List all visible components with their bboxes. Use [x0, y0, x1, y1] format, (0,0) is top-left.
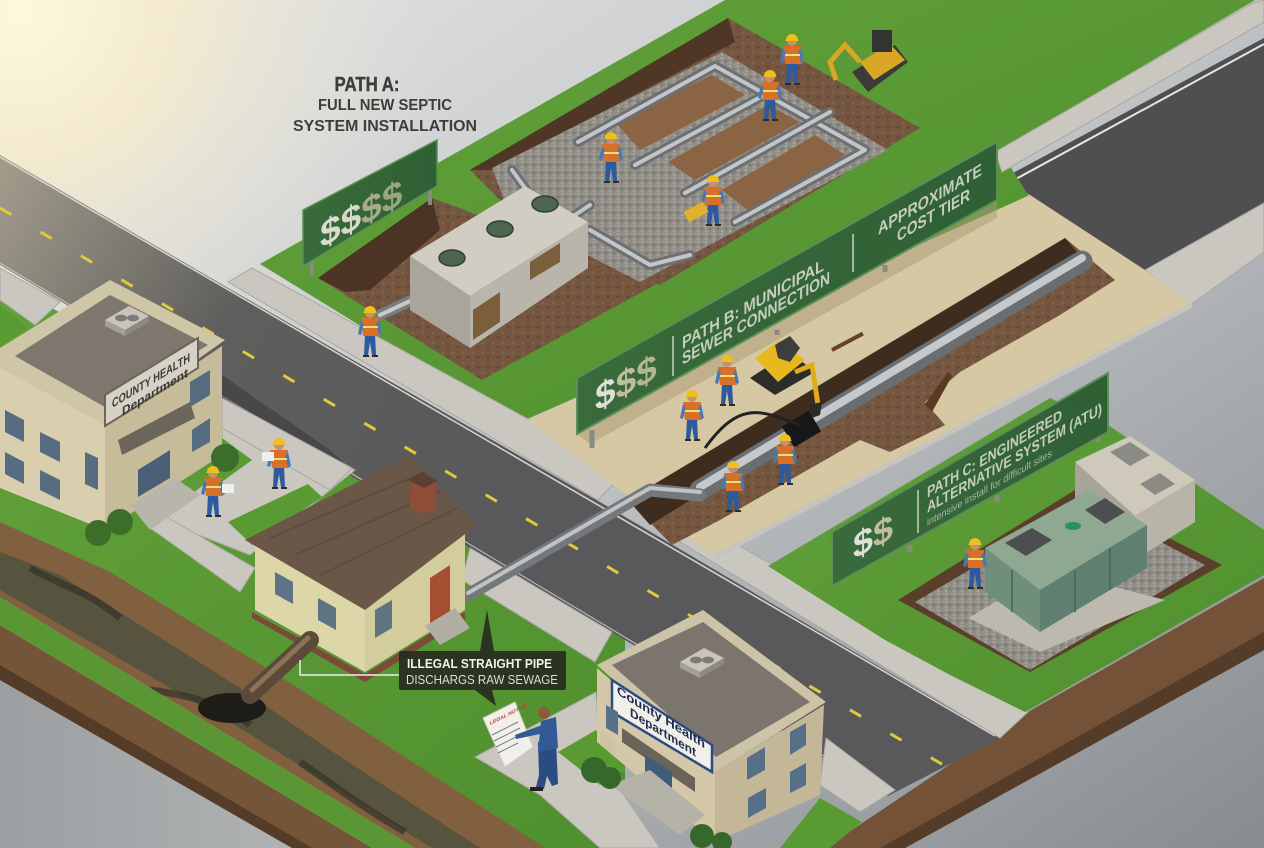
sign C: engineered alternative: [832, 373, 1108, 586]
notice document: LEGAL NOTICE: [490, 702, 528, 727]
callout: illegal straight pipe: DISCHARGS RAW SEWAGE: [406, 673, 558, 687]
callout: illegal straight pipe: ILLEGAL STRAIGHT PIPE: [407, 657, 552, 671]
building sign: COUNTY HEALTH: [112, 350, 190, 411]
drain field pipes: [380, 66, 865, 315]
sign C heading: PATH C: ENGINEERED: [927, 406, 1062, 502]
entrance and windows: [5, 370, 210, 530]
path A workers: [358, 34, 804, 357]
path A excavation: [318, 18, 920, 380]
base soil edge: front right: [825, 578, 1264, 848]
inspectors at left building: [201, 438, 291, 517]
title: path A: FULL NEW SEPTIC: [318, 97, 452, 114]
chimney: [410, 475, 436, 514]
main diagonal road: [0, 155, 1000, 796]
septic tank: [410, 186, 588, 348]
building shadow on road: [222, 375, 352, 470]
lower left grass lot: [0, 280, 625, 848]
sign C dollars: $$: [853, 506, 893, 568]
sign B: municipal sewer: [577, 142, 997, 448]
sign C: engineered alternative: ALTERNATIVE SYSTEM (ATU): [927, 399, 1102, 517]
green ATU tank: [968, 490, 1165, 652]
sign A: cost tier: [303, 140, 437, 275]
sign C sub-text: intensive install for difficult sites: [927, 447, 1052, 529]
building sign: Department: [630, 705, 696, 760]
house: [245, 455, 477, 682]
building sign: [105, 338, 198, 426]
illegal discharge pipe: [250, 638, 310, 695]
callout: illegal straight pipe: [300, 610, 566, 706]
sign B: municipal sewer: SEWER CONNECTION: [682, 267, 830, 369]
official in blue suit: [515, 707, 558, 791]
sign B heading: PATH B: MUNICIPAL: [682, 254, 824, 353]
creek with sewage: [0, 522, 545, 848]
bushes: [85, 444, 239, 546]
base soil edge: front left: [0, 625, 372, 848]
path B trench: [468, 238, 1115, 595]
left county health department building: [0, 280, 239, 546]
concrete control box: [1075, 436, 1195, 560]
front grass strip: [0, 597, 415, 848]
yellow excavator: [750, 332, 864, 418]
upper right cross road: [1000, 38, 1264, 272]
path C grass lot: [768, 398, 1264, 712]
roof: [245, 455, 477, 610]
title: path A: SYSTEM INSTALLATION: [293, 118, 477, 135]
road lane dashes: [0, 208, 945, 766]
dirt strips: [615, 75, 845, 212]
building sign: Department: [122, 365, 188, 419]
entrance and windows: [600, 705, 806, 835]
title: path A: PATH A:: [334, 74, 400, 96]
soil pit: tank: [318, 198, 660, 380]
mini excavator: [830, 30, 908, 92]
path B beige corridor: [528, 195, 1192, 556]
gravel bed: [492, 52, 888, 282]
building sign: [612, 680, 712, 772]
title: path A: [293, 74, 477, 135]
bushes: [581, 757, 732, 848]
sign B dollars: $$$: [595, 345, 657, 420]
tank lids: [439, 196, 558, 266]
path C pit and ATU: [898, 436, 1222, 672]
trench sewer pipe: [700, 258, 1082, 490]
sign B cost tier label: APPROXIMATE: [878, 159, 982, 239]
pipe from house: [468, 488, 700, 595]
path A lot grass: [260, 0, 1255, 420]
grass patches along walks: [0, 305, 862, 848]
bottom county health department building: [581, 610, 826, 848]
soil pit: drain field: [470, 18, 920, 285]
door and windows: [430, 565, 450, 624]
path B workers: [680, 355, 797, 512]
building sign: County Health: [617, 683, 705, 751]
legal notice and official: [483, 702, 558, 791]
path C worker: [963, 538, 987, 589]
sign A dollars: $$$$: [320, 171, 402, 257]
sign B: municipal sewer: COST TIER: [897, 184, 970, 246]
